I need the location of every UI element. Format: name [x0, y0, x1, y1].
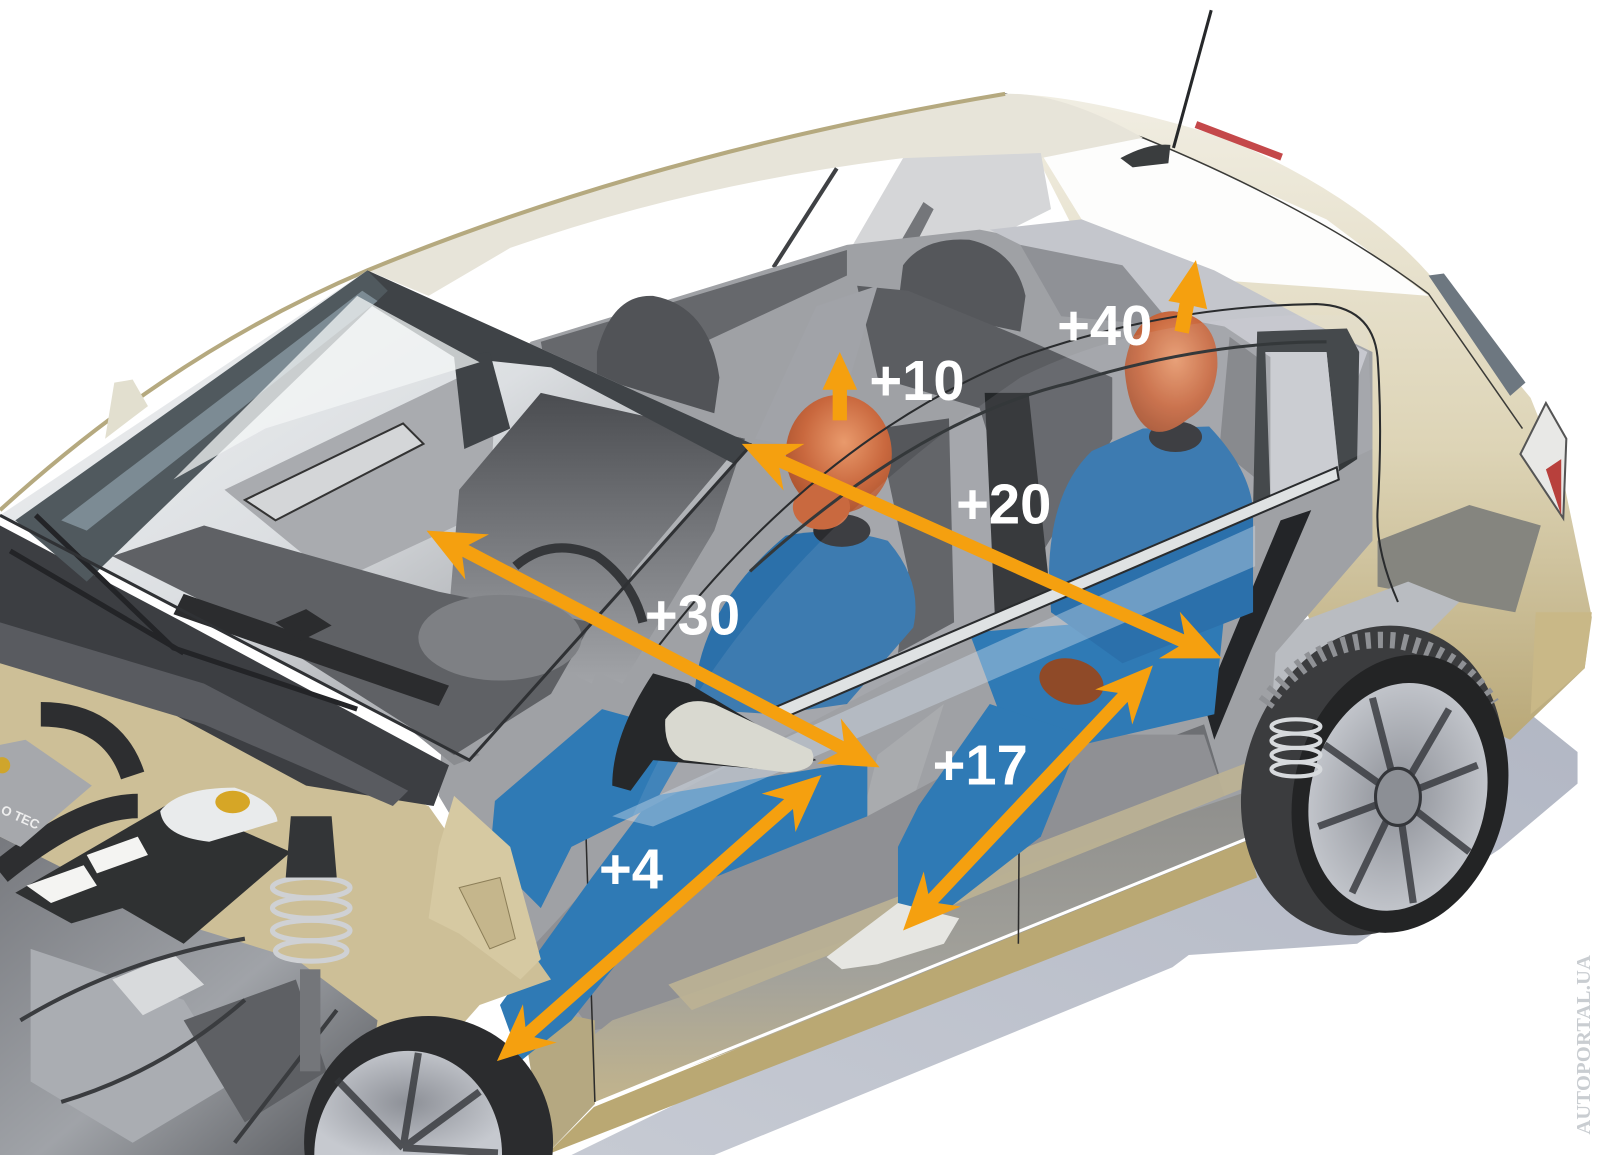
rear side strut: [773, 168, 837, 267]
tan inner wing: [0, 653, 551, 1155]
spokes: [337, 1053, 498, 1153]
fuse box: [15, 801, 291, 944]
yellow cap: [215, 791, 250, 813]
neck: [1149, 421, 1202, 452]
door lower panels: [520, 653, 1281, 1155]
rear upper pillar: [847, 153, 1051, 296]
seat recliner knob: [878, 816, 918, 867]
bonnet cowl and wipers: [0, 525, 480, 806]
cowl dark strip: [173, 594, 449, 706]
vent: [276, 609, 332, 641]
shoe: [827, 903, 959, 969]
left tint band: [15, 270, 388, 582]
strut boot: [286, 816, 337, 877]
arrow: +17 span: [884, 648, 1171, 948]
tyre tread: [1265, 640, 1492, 704]
ground shadow: [571, 714, 1578, 1155]
floor carpet: [531, 735, 1224, 1031]
front wheel: [304, 1016, 553, 1155]
thigh: [969, 612, 1224, 745]
hand: [1034, 651, 1109, 712]
engine block: [0, 837, 378, 1155]
door top curve: [653, 304, 1398, 653]
windscreen: [0, 270, 752, 760]
front cushion: [663, 857, 867, 959]
heat shield: [1255, 582, 1459, 704]
brake light: [1196, 124, 1282, 157]
arrow: +10 up: [822, 352, 857, 420]
roof: [0, 94, 1143, 510]
front backrest side: [755, 286, 878, 449]
label: +30: +30: [645, 584, 740, 647]
side glass opening: [541, 161, 903, 342]
rim: [1285, 664, 1511, 930]
head: [786, 395, 892, 513]
TEC label: O TEC: [0, 802, 42, 833]
belt chrome strip: [776, 467, 1339, 719]
neck: [813, 514, 870, 547]
hoses: [0, 714, 138, 872]
front backrest: [439, 393, 745, 684]
aerial: [1120, 10, 1211, 167]
pillar seat base: [852, 704, 944, 898]
near leg: [500, 760, 867, 1061]
hatch seam: [1005, 94, 1522, 429]
parcel shelf: [990, 219, 1367, 408]
front seat: [439, 286, 954, 959]
rim: [314, 1051, 502, 1155]
seat side bolster: [1204, 510, 1311, 740]
rear dummy: [827, 311, 1311, 969]
B pillar: [985, 393, 1051, 617]
strut spring: [272, 877, 350, 961]
wiper: [10, 515, 357, 709]
spokes: [1318, 698, 1478, 903]
rear bumper panel: [1531, 612, 1592, 714]
window frames and door glass: [612, 304, 1398, 826]
lower screen edge: [0, 444, 752, 760]
arrow: +20 span: [731, 421, 1232, 682]
front dummy: [490, 395, 916, 1061]
cam cover: [0, 740, 92, 847]
front door edge panel: [520, 1005, 595, 1155]
head: [1124, 311, 1217, 432]
mirror stub: [105, 380, 148, 439]
backrest through glass: [449, 393, 745, 684]
rear right backrest: [1219, 337, 1257, 480]
watermark: AUTOPORTAL.UA: [1573, 955, 1595, 1135]
rear window strip: [1429, 273, 1526, 396]
rear compartment box: [1378, 505, 1541, 612]
arrow: +4 span: [480, 756, 838, 1080]
rear wheel: [1198, 588, 1546, 973]
coolant reservoir: [160, 788, 278, 842]
rear headrest: [898, 239, 1026, 332]
sill: [546, 841, 1257, 1155]
bulkhead panel: [429, 796, 541, 980]
suspension spring: [1271, 719, 1320, 776]
steering wheel: [515, 548, 643, 622]
door cut line: [1018, 653, 1020, 944]
door upper trim: [541, 250, 847, 398]
dashboard: [112, 525, 592, 755]
rear cushion: [1041, 724, 1219, 832]
front headrest: [597, 296, 719, 413]
tyre: [304, 1016, 553, 1155]
torso: [694, 532, 916, 714]
label: +17: +17: [933, 734, 1028, 797]
far leg: [490, 709, 694, 908]
rear glass opening: [1041, 138, 1429, 296]
tail lamp: [1520, 403, 1566, 518]
arrow: +40 up: [1168, 260, 1207, 334]
rear backrest: [857, 286, 1112, 571]
door card seen through: [224, 372, 495, 582]
torso: [1049, 426, 1253, 663]
B pillar belt strap: [816, 202, 934, 398]
door glass wash: [633, 315, 1372, 816]
rear window frame: [1253, 329, 1359, 508]
side impact bar: [668, 750, 1281, 1010]
rear legs: [898, 704, 1082, 918]
label: +10: +10: [869, 349, 965, 412]
top tint band: [367, 270, 752, 464]
arrow: +30 span: [415, 508, 891, 790]
rear seat: [857, 239, 1257, 832]
tyre: [1198, 588, 1546, 973]
label: +40: +40: [1057, 294, 1152, 357]
rear door inner view: [1270, 352, 1339, 500]
reflective highlight: [173, 296, 480, 480]
door mirror: [612, 673, 816, 791]
label: +20: +20: [956, 472, 1051, 535]
light blue window reflection: [612, 525, 1255, 826]
interior base: [439, 219, 1372, 1102]
label: +4: +4: [599, 838, 663, 901]
engine bay: [0, 653, 551, 1155]
rear body shell: [1005, 94, 1592, 740]
